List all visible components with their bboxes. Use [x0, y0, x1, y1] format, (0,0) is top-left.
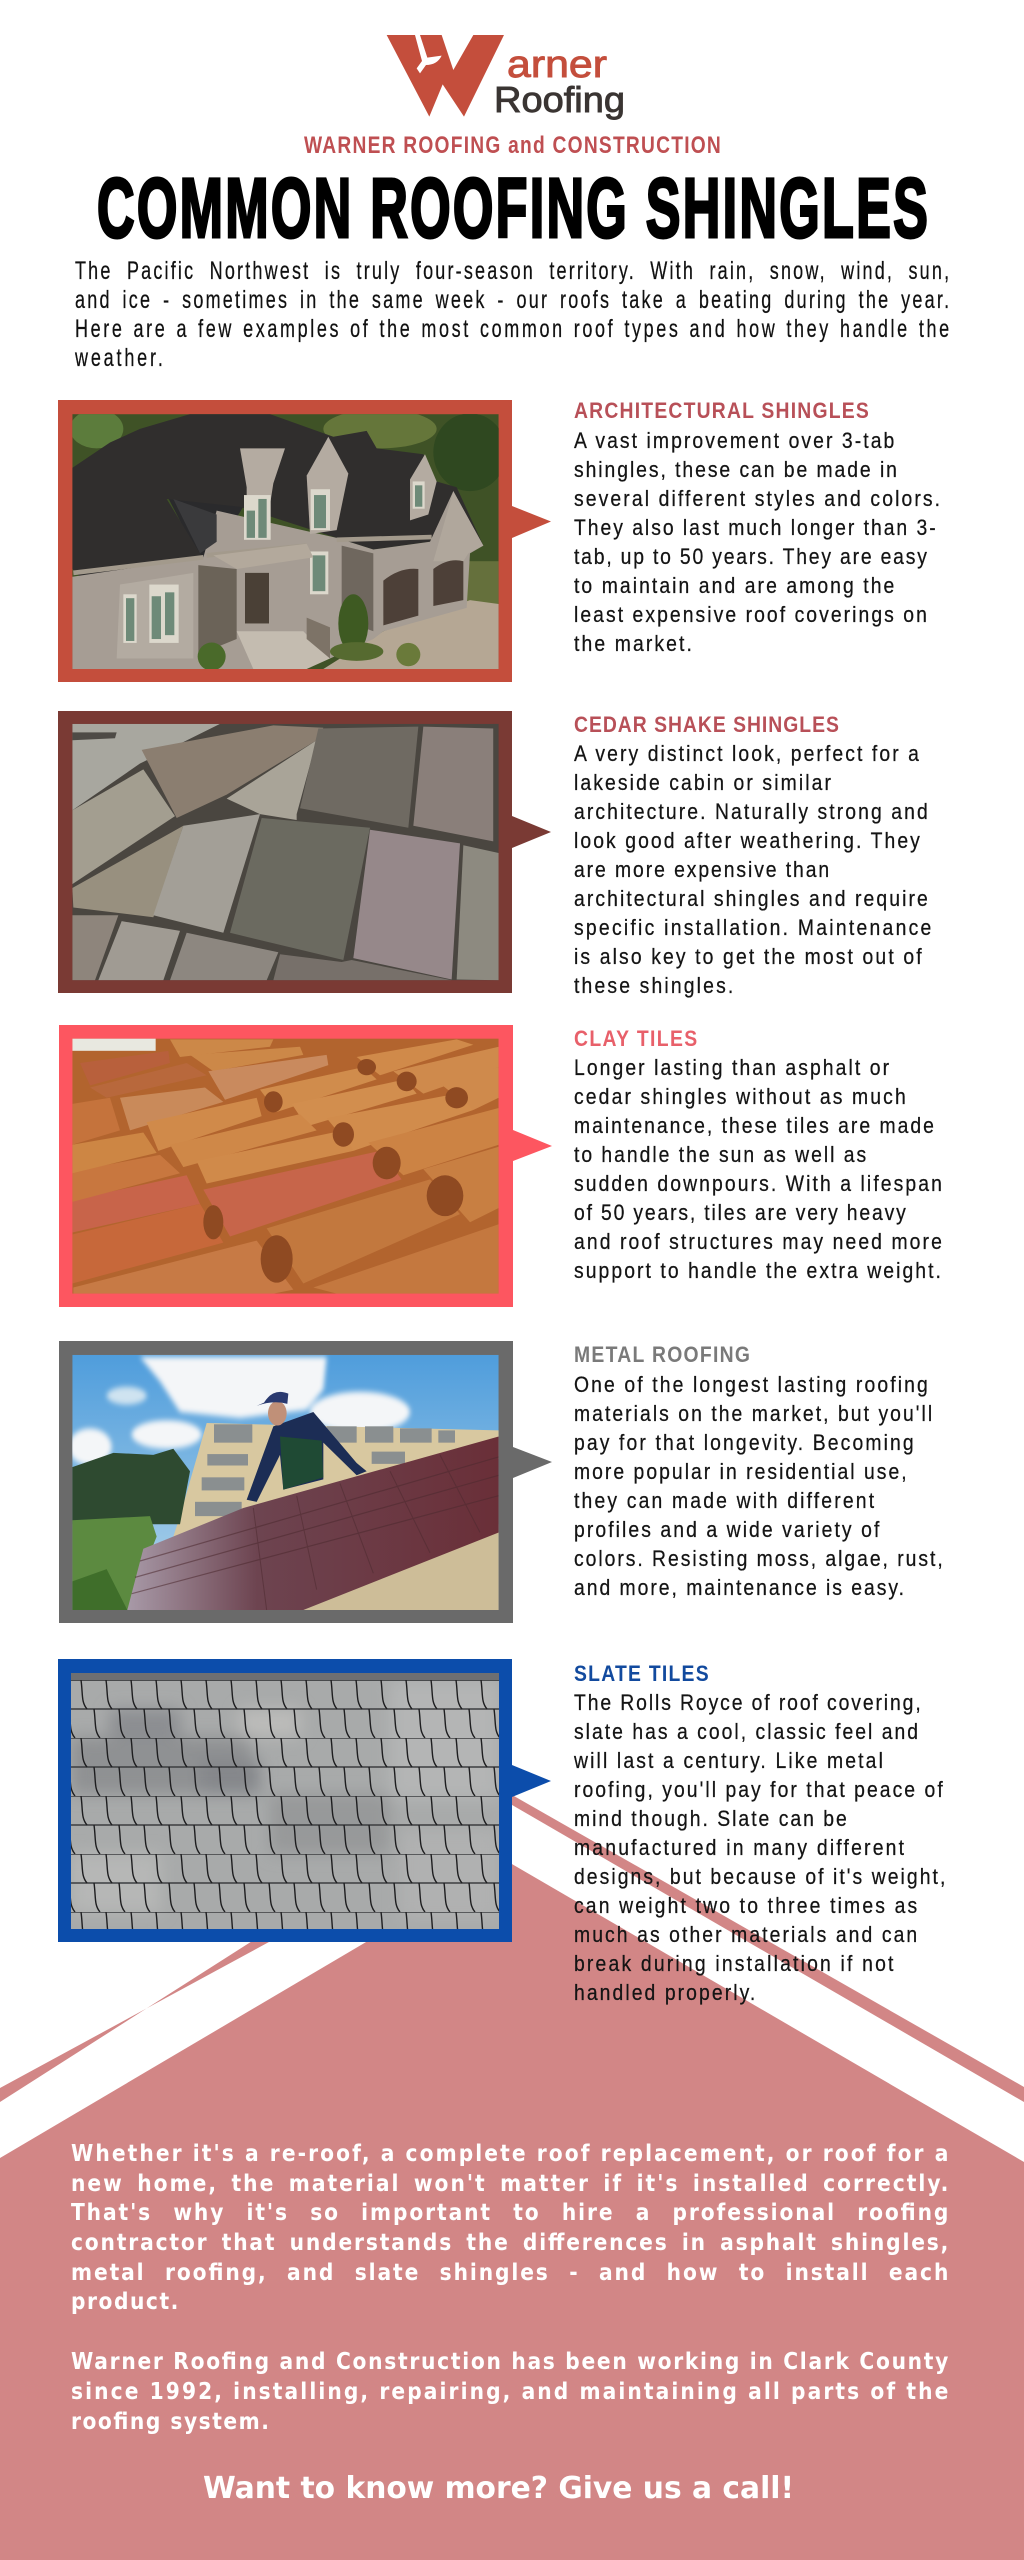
photo: clay tiles [72, 1039, 499, 1294]
body copy: shingles, these can be made in [574, 458, 897, 482]
body copy: cedar shingles without as much [574, 1085, 906, 1109]
body copy [574, 1373, 943, 1600]
background roof shape [0, 1788, 1024, 2560]
heading: METAL ROOFING [574, 1343, 750, 1367]
call to action: Want to know more? Give us a call! [203, 2471, 794, 2506]
body copy: more popular in residential use, [574, 1460, 907, 1484]
heading: CLAY TILES [574, 1027, 697, 1051]
body copy: much as other materials and can [574, 1923, 917, 1947]
logo: Warner Roofing: Roofing [494, 79, 625, 120]
body copy: A very distinct look, perfect for a [574, 742, 919, 766]
body copy: materials on the market, but you'll [574, 1402, 932, 1426]
body copy: Longer lasting than asphalt or [574, 1056, 889, 1080]
photo: metal roof and worker [68, 1355, 499, 1610]
logo: Warner Roofing [387, 35, 625, 120]
text: clay tiles [574, 1027, 942, 1283]
body copy: The Rolls Royce of roof covering, [574, 1691, 921, 1715]
image frame [59, 1025, 513, 1307]
paragraph: importance of installation: contractor that understands the differences in asphalt shingles, [71, 2230, 948, 2256]
body copy: slate has a cool, classic feel and [574, 1720, 918, 1744]
paragraph: company history: roofing system. [71, 2409, 269, 2435]
photo: cedar shakes [72, 724, 499, 980]
intro text: weather. [74, 343, 163, 372]
body copy: colors. Resisting moss, algae, rust, [574, 1547, 943, 1571]
body copy: to maintain and are among the [574, 574, 894, 598]
body copy [573, 1691, 945, 2005]
intro text: The Pacific Northwest is truly four-season territory. With rain, snow, wind, sun, [75, 256, 949, 285]
body copy: break during installation if not [574, 1952, 894, 1976]
heading: SLATE TILES [574, 1662, 709, 1686]
image frame [58, 1659, 512, 1942]
body copy: They also last much longer than 3- [574, 516, 936, 540]
body copy: sudden downpours. With a lifespan [574, 1172, 942, 1196]
body copy: these shingles. [574, 974, 733, 998]
intro text: Here are a few examples of the most common roof types and how they handle the [75, 314, 949, 343]
photo: house [70, 409, 507, 671]
logo: Warner Roofing: arner [507, 44, 607, 86]
body copy: maintenance, these tiles are made [574, 1114, 934, 1138]
body copy: architectural shingles and require [574, 887, 928, 911]
photo: slate tiles [71, 1673, 499, 1929]
heading: ARCHITECTURAL SHINGLES [574, 399, 869, 423]
paragraph: importance of installation: new home, the material won't matter if it's installed correctly. [71, 2171, 948, 2197]
arrow [512, 506, 551, 538]
title: COMMON ROOFING SHINGLES [97, 161, 928, 255]
body copy [574, 1056, 942, 1283]
subtitle: WARNER ROOFING and CONSTRUCTION [304, 131, 721, 159]
image frame [58, 400, 512, 682]
paragraph: importance of installation: Whether it's a re-roof, a complete roof replacement, or roof for a [71, 2141, 948, 2167]
body copy [574, 429, 940, 656]
paragraph: company history: Warner Roofing and Construction has been working in Clark County [71, 2349, 948, 2375]
intro text: and ice - sometimes in the same week - our roofs take a beating during the year. [75, 285, 949, 314]
paragraph: company history [71, 2349, 948, 2435]
text: architectural shingles [574, 399, 940, 656]
heading: CEDAR SHAKE SHINGLES [574, 713, 839, 737]
body copy: mind though. Slate can be [574, 1807, 847, 1831]
panel: slate tiles [58, 1659, 551, 1942]
body copy: pay for that longevity. Becoming [574, 1431, 914, 1455]
text: cedar shake shingles [574, 713, 931, 998]
paragraph: importance of installation [71, 2141, 948, 2315]
body copy: can weight two to three times as [574, 1894, 917, 1918]
body copy: to handle the sun as well as [574, 1143, 866, 1167]
intro text [74, 256, 949, 372]
closing text block [71, 2141, 948, 2435]
panel: clay tiles [59, 1025, 552, 1307]
body copy: the market. [574, 632, 692, 656]
image frame [59, 1341, 513, 1623]
body copy: lakeside cabin or similar [574, 771, 831, 795]
body copy: One of the longest lasting roofing [574, 1373, 928, 1397]
body copy: handled properly. [574, 1981, 755, 2005]
arrow [513, 1130, 552, 1161]
body copy: tab, up to 50 years. They are easy [574, 545, 927, 569]
body copy: least expensive roof coverings on [574, 603, 927, 627]
text: slate tiles [573, 1662, 945, 2005]
body copy: roofing, you'll pay for that peace of [574, 1778, 943, 1802]
panel: metal roofing [59, 1341, 552, 1623]
body copy: will last a century. Like metal [573, 1749, 883, 1773]
paragraph: importance of installation: metal roofing, and slate shingles - and how to install each [71, 2260, 948, 2286]
body copy: is also key to get the most out of [574, 945, 922, 969]
body copy: manufactured in many different [574, 1836, 904, 1860]
body copy: and roof structures may need more [574, 1230, 942, 1254]
arrow [512, 816, 551, 848]
icon: W with hammer [387, 35, 504, 117]
arrow [512, 1765, 551, 1797]
panel: architectural shingles [58, 400, 551, 682]
body copy: look good after weathering. They [574, 829, 920, 853]
body copy: architecture. Naturally strong and [574, 800, 928, 824]
paragraph: importance of installation: That's why it's so important to hire a professional roofing [71, 2200, 948, 2226]
body copy: they can made with different [574, 1489, 874, 1513]
paragraph: company history: since 1992, installing, repairing, and maintaining all parts of the [71, 2379, 948, 2405]
body copy: specific installation. Maintenance [574, 916, 931, 940]
arrow [513, 1447, 552, 1478]
body copy [574, 742, 931, 998]
image frame [58, 711, 512, 993]
text: metal roofing [574, 1343, 943, 1600]
body copy: and more, maintenance is easy. [574, 1576, 904, 1600]
body copy: of 50 years, tiles are very heavy [574, 1201, 906, 1225]
body copy: several different styles and colors. [574, 487, 940, 511]
body copy: support to handle the extra weight. [574, 1259, 941, 1283]
body copy: profiles and a wide variety of [574, 1518, 880, 1542]
paragraph: importance of installation: product. [71, 2289, 178, 2315]
panel: cedar shake shingles [58, 711, 551, 993]
body copy: A vast improvement over 3-tab [574, 429, 894, 453]
body copy: designs, but because of it's weight, [574, 1865, 945, 1889]
body copy: are more expensive than [574, 858, 829, 882]
